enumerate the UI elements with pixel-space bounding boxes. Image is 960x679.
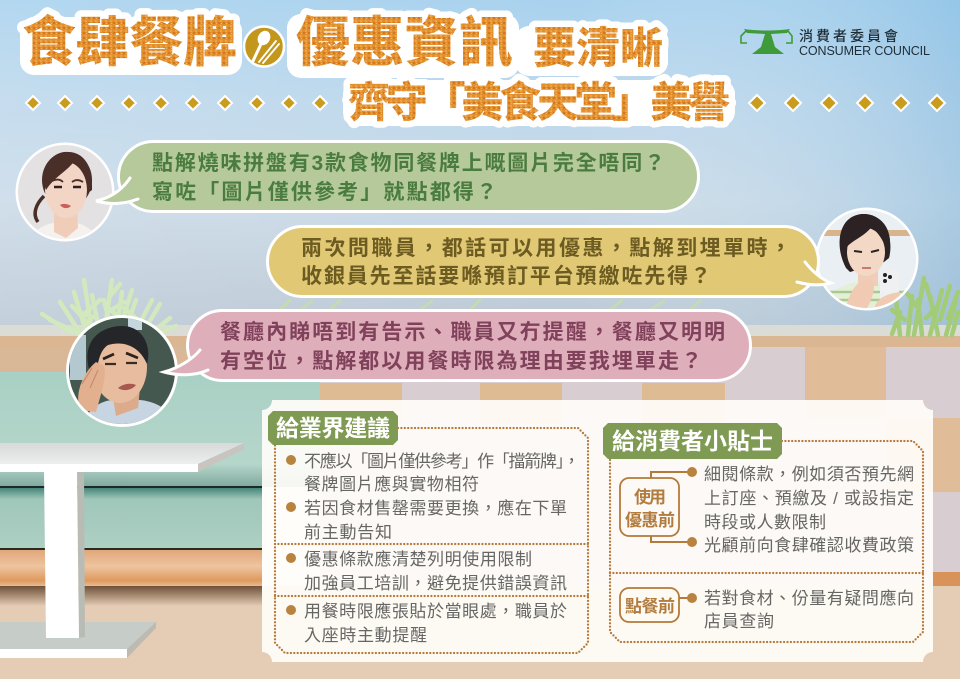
- tips text: before using offer: 細閱條款，例如須否預先網: [704, 465, 914, 484]
- title: [20, 0, 735, 130]
- bubble: customer two: 收銀員先至話要喺預訂平台預繳咗先得？: [301, 264, 711, 288]
- title: 齊守「美食天堂」美譽: [348, 69, 730, 130]
- bullet list: advice for the trade: 優惠條款應清楚列明使用限制: [304, 549, 532, 569]
- panel: tips for consumers: [603, 423, 923, 642]
- heading tag: advice for the trade: 給業界建議: [276, 415, 390, 441]
- bullet list: advice for the trade: 前主動告知: [304, 523, 392, 542]
- bubble: customer three: 餐廳內睇唔到有告示、職員又冇提醒，餐廳又明明: [220, 320, 725, 344]
- plant: right: [892, 278, 958, 335]
- tips text: before ordering: [704, 588, 914, 631]
- title: 優惠資訊: [296, 0, 513, 77]
- title: 要清晰: [533, 14, 663, 76]
- bubble: customer one: 寫咗「圖片僅供參考」就點都得？: [152, 181, 497, 204]
- title: 食肆餐牌: [22, 0, 237, 77]
- bubble: customer three: [163, 310, 750, 380]
- bullet list: advice for the trade: 入座時主動提醒: [304, 626, 427, 645]
- plant: left: [42, 280, 176, 334]
- tips text: before using offer: [704, 465, 914, 555]
- bullet list: advice for the trade: 若因食材售罄需要更換，應在下單: [304, 498, 567, 518]
- label box: before using offer: 優惠前: [625, 511, 675, 530]
- tips text: before ordering: 若對食材、份量有疑問應向: [704, 588, 914, 608]
- tips text: before using offer: 光顧前向食肆確認收費政策: [704, 536, 914, 555]
- panel: advice cards: [262, 400, 933, 662]
- avatar: frowning woman: [15, 142, 115, 243]
- bullet list: advice for the trade: 餐牌圖片應與實物相符: [304, 474, 479, 494]
- avatar: troubled man: [66, 315, 178, 427]
- label box: before using offer: [620, 467, 697, 547]
- bubble: customer three: 有空位，點解都以用餐時限為理由要我埋單走？: [220, 349, 702, 373]
- panel: advice for the trade: [268, 411, 588, 653]
- bubble: customer one: 點解燒味拼盤有3款食物同餐牌上嘅圖片完全唔同？: [152, 151, 665, 175]
- icon: spoon and chopsticks: [244, 26, 284, 66]
- tips text: before using offer: 時段或人數限制: [704, 513, 826, 532]
- label box: before ordering: [620, 588, 697, 622]
- bullet list: advice for the trade: 用餐時限應張貼於當眼處，職員於: [304, 601, 567, 621]
- title: 齊守「美食天堂」美譽: [348, 69, 730, 130]
- label box: before ordering: 點餐前: [625, 597, 675, 616]
- bubble: customer two: [268, 226, 832, 296]
- table: [0, 443, 244, 658]
- heading tag: tips for consumers: 給消費者小貼士: [612, 428, 773, 454]
- bubble: customer one: [95, 142, 698, 212]
- label box: before using offer: 使用: [634, 488, 666, 507]
- avatar: woman with phone: [815, 207, 919, 312]
- heading tag: tips for consumers: [603, 423, 782, 459]
- bullet list: advice for the trade: [286, 451, 580, 645]
- heading tag: advice for the trade: [268, 411, 398, 445]
- decorative diamonds: [26, 95, 945, 111]
- logo: Consumer Council: [741, 28, 930, 58]
- tips text: before ordering: 店員查詢: [704, 612, 774, 631]
- logo: Consumer Council: 消費者委員會: [799, 28, 898, 44]
- title: 優惠資訊: [296, 0, 513, 77]
- title: 食肆餐牌: [22, 0, 237, 77]
- title: 要清晰: [533, 14, 663, 76]
- plant tips behind bubbles: [280, 300, 700, 310]
- bubble: customer two: 兩次問職員，都話可以用優惠，點解到埋單時，: [301, 237, 791, 260]
- tips text: before using offer: 上訂座、預繳及 / 或設指定: [704, 489, 914, 508]
- bullet list: advice for the trade: 不應以「圖片僅供參考」作「擋箭牌」，: [304, 451, 580, 471]
- logo: Consumer Council: CONSUMER COUNCIL: [799, 44, 930, 58]
- bullet list: advice for the trade: 加強員工培訓，避免提供錯誤資訊: [304, 574, 567, 593]
